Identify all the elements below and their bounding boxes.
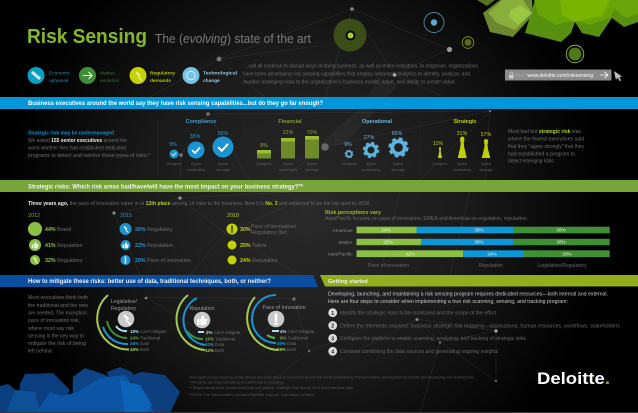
column: 2012: 41% Reputation: [45, 243, 83, 249]
column: 2015: 26% Regulatory: [135, 227, 173, 233]
intro paragraph: have been developing risk sensing capabilities that employ advanced analytics to identify, analyze, and: [243, 72, 470, 78]
panel: compliance: Agree: [191, 162, 201, 166]
text: strategic risk undermanaged: [27, 130, 151, 159]
panel: operational: [341, 119, 407, 172]
subtitle: The (evolving) state of the art: [155, 31, 311, 46]
bar chart: risk perceptions: 38%: [556, 240, 566, 245]
bar chart: risk perceptions: 25%: [383, 240, 393, 245]
text: most had but strategic risk: where the fewest executives said: [508, 136, 584, 142]
panel: operational: Agree: [366, 162, 376, 166]
driver: market evolution: [79, 67, 120, 84]
banner: executives question: [0, 97, 638, 109]
text: most had but strategic risk: detect emerging risks.: [508, 158, 555, 164]
cursor icon: [614, 71, 622, 81]
steps list: [328, 308, 620, 356]
column: 2015: [120, 213, 191, 265]
driver: economic upheaval: Economic: [49, 70, 71, 76]
panel: strategic: strongly: [479, 168, 493, 172]
heading: risk perceptions vary: Asia/Pacific focuses on pace of innovation; EMEA and Americas on regulation, reputation.: [325, 216, 528, 222]
text: most had but strategic risk: Most had but strategic risk was: [508, 129, 581, 135]
bar chart: risk perceptions: 24%: [487, 251, 497, 256]
panel: financial: Financial: [278, 119, 302, 125]
steps list: Identify the strategic risks to be monitored and the scope of the effort: [340, 310, 497, 316]
bar chart: risk perceptions: Reputation: [479, 263, 503, 269]
intro paragraph: ...will all continue to disrupt ways of doing business, as well as entire industries. In response, organizations: [245, 64, 478, 70]
text: most had but strategic risk: had established a program to: [508, 152, 575, 158]
panel: financial: Disagree: [256, 162, 272, 166]
panel: financial: Agree: [307, 162, 317, 166]
bar chart: risk perceptions: 24%: [381, 228, 391, 233]
chart: pace of innovation arcs: 9% Traditional: [280, 335, 308, 340]
panel: operational: strongly: [391, 168, 405, 172]
panel: financial: 22%: [283, 130, 294, 136]
panel: compliance: Compliance: [186, 119, 216, 125]
column: 2015: 22% Reputation: [135, 243, 173, 249]
panel: financial: 8%: [260, 143, 268, 149]
column: 2015: 2015: [120, 213, 132, 219]
panel: operational: Agree: [393, 162, 403, 166]
panel: operational: 65%: [392, 131, 403, 137]
column: 2012: 44% Brand: [45, 227, 71, 233]
bar chart: risk perceptions: Asia/Pacific: [328, 252, 353, 258]
banner: how to mitigate: How to mitigate these risks: better use of data, traditional techniques, both, or neither?: [28, 279, 271, 285]
chart: pace of innovation arcs: 4% Can't mitigate: [280, 329, 315, 334]
panel: compliance: Disagree: [166, 162, 182, 166]
text: most executives: mitigate the risk of being: [28, 341, 86, 347]
steps list: Define the elements required: business strategic risk mapping—applications, human resources, workflows, stakeholders: [340, 323, 620, 329]
chart: legislative/regulatory arcs: 18% Can't mitigate: [130, 329, 167, 334]
chart: pace of innovation arcs: [247, 295, 315, 352]
text: most executives: Most executives think both: [28, 295, 88, 301]
text: most executives: pace of innovation risk,: [28, 318, 80, 324]
panel: strategic: Disagree: [432, 162, 448, 166]
text: getting started intro: [328, 292, 608, 305]
text: most had but strategic risk: that they "agree strongly" that they: [508, 144, 584, 150]
column: 2018: Regulatory (tie): [251, 230, 287, 236]
text: most executives: sensing is the key way to: [28, 333, 84, 339]
driver: market evolution: evolution: [100, 78, 120, 84]
panel: financial: moderately: [279, 168, 297, 172]
chart: legislative/regulatory arcs: [97, 295, 167, 352]
bar chart: risk perceptions: 38%: [474, 228, 484, 233]
column: 2018: Pace of innovation/: [251, 224, 297, 230]
panel: compliance: moderately: [187, 168, 205, 172]
driver: technological change: [182, 67, 237, 84]
light beam: [318, 78, 398, 145]
text: getting started intro: Here are four steps to consider when implementing a true risk scanning, sensing, and tracking program:: [328, 299, 568, 305]
column: 2018: 24% Reputation: [240, 258, 278, 264]
driver: economic upheaval: [28, 67, 71, 84]
panel: financial: strongly: [305, 168, 319, 172]
deloitte logo: Deloitte .: [537, 369, 610, 388]
chart: legislative/regulatory arcs: 24% Traditional: [130, 335, 160, 340]
footnotes: * Percents are may not add up to 100% due to rounding.: [189, 381, 284, 385]
driver: regulatory demands: [130, 67, 175, 84]
chart: pace of innovation arcs: 38% Both: [277, 347, 297, 352]
panel: strategic: Strategic: [453, 119, 477, 125]
column: 2018: 25% Talent: [240, 243, 267, 249]
network lines and nodes: [114, 9, 496, 413]
panel: operational: moderately: [362, 168, 380, 172]
chart: reputation arcs: 2% Can't mitigate: [206, 330, 241, 335]
column: 2015: 20% Pace of innovation: [135, 258, 191, 264]
banner: executives question: Business executives around the world say they have risk sensing capabilities...but do they go far enough?: [28, 101, 323, 107]
panel: strategic: moderately: [453, 168, 471, 172]
panel: compliance: 55%: [218, 131, 229, 137]
dividers: [158, 120, 420, 176]
panel: strategic: Agree: [457, 162, 467, 166]
column: 2012: [28, 213, 83, 265]
panel: strategic: 31%: [457, 131, 468, 137]
heading: risk perceptions vary: Risk perceptions vary: [325, 210, 381, 216]
bar chart: risk perceptions: EMEA: [339, 240, 353, 246]
text: most executives: are needed. The exception:: [28, 311, 88, 317]
hexagon cluster: green: [477, 0, 638, 42]
column: 2018: 2018: [227, 213, 239, 219]
text: strategic risk undermanaged: Strategic risk may be undermanaged: [28, 130, 114, 136]
url bar: http://www.deloitte.com/risksensing: [515, 73, 593, 79]
steps list: 4: [331, 349, 335, 355]
banner: getting started: Getting started: [328, 279, 368, 285]
driver: regulatory demands: demands: [150, 78, 171, 84]
hexagon cluster: blue: [0, 367, 180, 413]
bar chart: risk perceptions: Pace of innovation: [368, 263, 409, 269]
network nodes: [112, 7, 584, 382]
bar chart: risk perceptions: 38%: [556, 228, 566, 233]
chart: pace of innovation arcs: 49% Data: [277, 341, 297, 346]
bar chart: risk perceptions: Legislative/Regulatory: [537, 263, 587, 269]
bar chart: risk perceptions: Americas: [332, 228, 353, 234]
chart: legislative/regulatory arcs: 48% Both: [130, 347, 150, 352]
chart: pace of innovation arcs: Pace of Innovation: [263, 305, 306, 311]
title: Risk Sensing: [27, 25, 147, 48]
bar chart: risk perceptions: 36%: [474, 240, 484, 245]
bar chart: risk perceptions: 42%: [405, 251, 415, 256]
url bar: [505, 70, 612, 80]
panel: compliance: 35%: [190, 134, 201, 140]
intro paragraph: monitor emerging risks to the organization's business model, value, and ability to create value.: [243, 80, 456, 86]
footnotes: [189, 376, 475, 397]
banner: how to mitigate: [0, 275, 318, 287]
footnotes: ** Respondents could choose more than one answer. Strategic Risk Survey 2015 and enterprise data.: [189, 386, 354, 390]
driver: technological change: Technological: [203, 70, 237, 76]
driver: economic upheaval: upheaval: [49, 78, 68, 84]
column: 2012: 2012: [28, 213, 40, 219]
panel: strategic: Agree: [481, 162, 491, 166]
panel: operational: Operational: [362, 119, 392, 125]
intro paragraph: [243, 64, 478, 86]
footnotes: This report is from a survey of risk officers and executives at companies around the world conducted by Forbes Insights, and inquired by Deloitte and developing risk sensing tools.: [189, 376, 475, 380]
steps list: 3: [331, 336, 334, 342]
chart: legislative/regulatory arcs: Legislative/: [111, 299, 138, 305]
steps list: 1: [331, 311, 334, 317]
steps list: Continue combining the data sources and generating ongoing insights: [340, 349, 498, 355]
panel: financial: [256, 119, 319, 172]
panel: strategic: 57%: [481, 132, 492, 138]
text: most executives: [28, 295, 88, 354]
chart: legislative/regulatory arcs: 26% Data: [130, 341, 150, 346]
text: strategic risk undermanaged: programs to detect and monitor these types of risks:*: [28, 153, 151, 159]
footnotes: ©2015. For information, contact Deloitte Touche Tohmatsu Limited.: [189, 393, 315, 397]
banner: getting started: [320, 275, 638, 286]
panel: financial: 70%: [307, 130, 318, 136]
column: 2018: 30%: [240, 227, 251, 233]
text: three years ago: Three years ago, the pace of innovation came in at 12th place among 14 risks to the business. Now it is No. 3 and expected to be the top spot by 2018.: [28, 201, 371, 207]
bar chart: risk perceptions: 33%: [562, 251, 572, 256]
panel: financial: Agree: [283, 162, 293, 166]
steps list: 2: [331, 324, 334, 330]
panel: operational: 9%: [344, 142, 352, 148]
panel: strategic: [432, 119, 493, 172]
chart: reputation arcs: 40% Data: [205, 342, 225, 347]
bar chart: risk perceptions: [328, 227, 610, 269]
panel: strategic: 11%: [433, 141, 443, 147]
column: 2018: [226, 213, 297, 264]
panel: compliance: 9%: [169, 142, 177, 148]
text: most had but strategic risk: [508, 129, 584, 164]
chart: reputation arcs: [176, 295, 241, 353]
text: strategic risk undermanaged: world whether they had established dedicated: [27, 146, 126, 152]
panel: operational: Disagree: [341, 162, 357, 166]
banner: strategic risks question: Strategic risks: Which risk areas had/have/will have the most impact on your business strategy?**: [28, 184, 304, 190]
text: getting started intro: Developing, launching, and maintaining a risk sensing program requires dedicated resources—both internal and external.: [328, 292, 608, 298]
panel: compliance: Agree: [218, 162, 228, 166]
chart: reputation arcs: 42% Both: [205, 348, 225, 353]
heading: risk perceptions vary: [325, 210, 528, 222]
chart: reputation arcs: Reputation: [189, 306, 215, 312]
text: most executives: left behind.: [28, 348, 53, 354]
chart: reputation arcs: 16% Traditional: [205, 336, 235, 341]
banner: strategic risks question: [0, 180, 638, 192]
driver: regulatory demands: Regulatory: [150, 70, 175, 76]
driver: technological change: change: [203, 78, 220, 84]
column: 2012: 32% Regulatory: [45, 258, 83, 264]
steps list: Configure the platform to enable scanning, analyzing, and tracking of strategic risks: [340, 336, 526, 342]
text: most executives: where most say risk: [28, 326, 74, 332]
panel: compliance: [166, 119, 234, 172]
chart: legislative/regulatory arcs: Regulatory: [111, 306, 136, 312]
text: most executives: the traditional and the new: [28, 303, 88, 309]
panel: operational: 27%: [364, 135, 375, 141]
bottom edge: [0, 412, 638, 413]
panel: compliance: strongly: [216, 168, 230, 172]
driver: market evolution: Market: [100, 70, 115, 76]
text: strategic risk undermanaged: We asked 155 senior executives around the: [28, 138, 127, 144]
